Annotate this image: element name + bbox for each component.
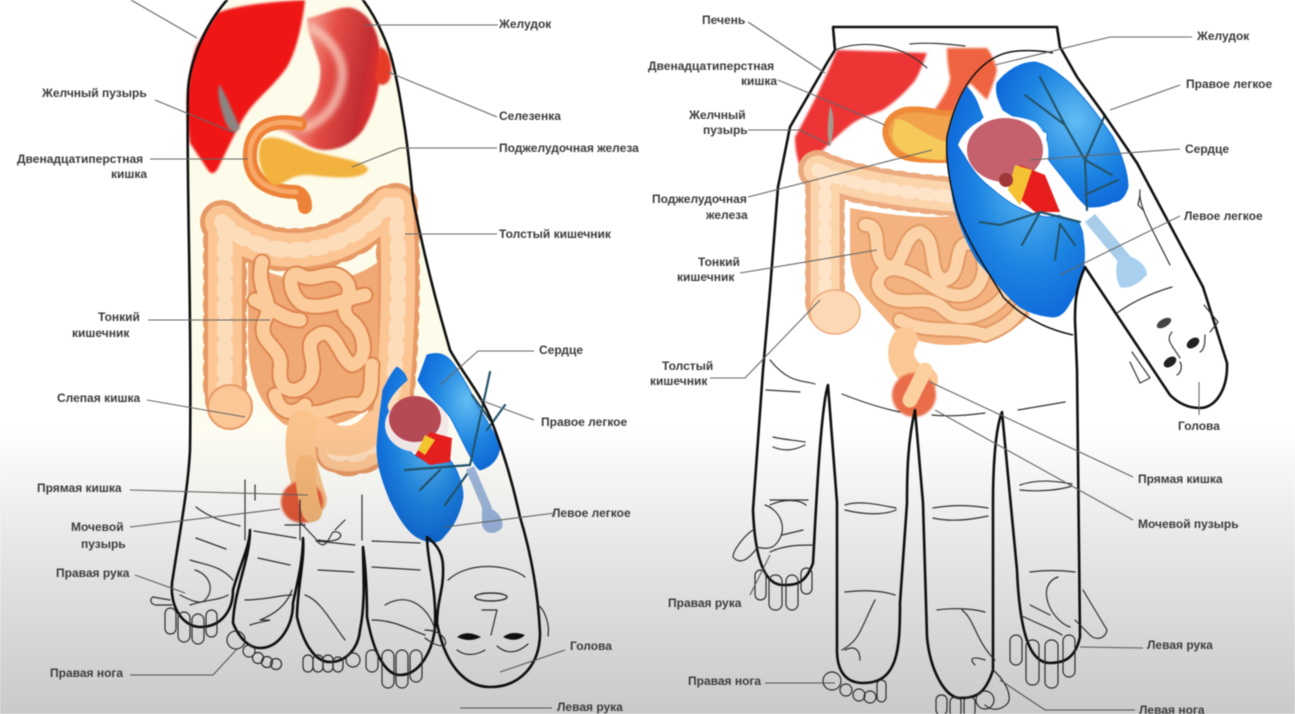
hand palm fill: [753, 27, 1227, 698]
labels: foot: Сердце: [539, 343, 583, 357]
labels: foot: кишечник: [72, 326, 130, 340]
labels: foot: Правая нога: [50, 666, 123, 680]
labels: hand: Толстый: [662, 359, 713, 373]
labels: hand: Правое легкое: [1186, 77, 1272, 91]
rectum (foot): [300, 425, 312, 500]
labels: hand: кишка: [741, 74, 777, 88]
labels: foot: Левое легкое: [552, 506, 631, 520]
toes: left hand on hand: [1010, 590, 1107, 688]
cecum (foot): [208, 385, 252, 429]
labels: foot: Селезенка: [499, 109, 561, 123]
pancreas (foot): [259, 137, 368, 186]
labels: foot: Голова: [570, 639, 612, 653]
labels: foot: Правое легкое: [541, 415, 628, 429]
cecum (hand): [810, 290, 860, 334]
labels: hand: Мочевой пузырь: [1138, 517, 1239, 531]
sigmoid bulge (foot): [322, 425, 376, 441]
labels: foot: Желудок: [498, 17, 552, 31]
palm creases: [757, 43, 1075, 665]
liver (foot): [187, 0, 305, 173]
labels: hand: Тонкий: [698, 255, 740, 269]
labels: foot: Толстый кишечник: [499, 227, 612, 241]
labels: hand: Левая рука: [1147, 638, 1213, 652]
labels: foot: Прямая кишка: [37, 481, 122, 495]
toes: right foot on hand: [823, 672, 886, 703]
heart (foot): [385, 396, 452, 465]
duodenum and pancreas (hand): [885, 109, 955, 160]
labels: foot: Желчный пузырь: [41, 86, 147, 100]
bronchi (hand): [980, 77, 1118, 260]
left lung (hand): [948, 87, 1084, 317]
liver (hand): [795, 50, 927, 167]
toes: left hand on foot: [366, 630, 446, 688]
small intestine (hand): [850, 208, 1030, 345]
thumb base curve: [947, 51, 1073, 335]
labels: hand: Двенадцатиперстная: [648, 59, 774, 73]
right lung (hand): [996, 62, 1128, 207]
heart (hand): [958, 116, 1085, 222]
trachea (foot): [470, 468, 503, 533]
toes: left foot on hand: [936, 670, 1009, 714]
stomach (hand): [933, 48, 997, 137]
large intestine (foot): [208, 205, 398, 454]
labels: hand: Желчный: [688, 108, 746, 122]
labels: hand: пузырь: [703, 123, 748, 137]
bladder (foot): [281, 481, 323, 523]
labels: hand: Прямая кишка: [1138, 472, 1223, 486]
head on foot: [457, 593, 548, 654]
foot silhouette: [172, 0, 540, 687]
large intestine (hand): [810, 170, 955, 334]
foot outline: [172, 0, 540, 687]
labels: hand: Левое легкое: [1184, 209, 1263, 223]
labels: foot: Двенадцатиперстная: [17, 152, 143, 166]
labels: hand: кишечник: [677, 270, 735, 284]
head on hand: [1117, 190, 1218, 383]
labels: foot: Мочевой: [71, 520, 124, 534]
bladder (hand): [892, 373, 936, 417]
small intestine (foot): [248, 262, 378, 426]
labels: hand: Голова: [1178, 419, 1220, 433]
labels: foot: Слепая кишка: [57, 391, 140, 405]
labels: foot: Левая рука: [557, 700, 623, 714]
labels: hand: Печень: [702, 13, 745, 27]
labels: hand: Правая нога: [688, 674, 761, 688]
bronchi (foot): [405, 372, 505, 505]
labels: foot: Правая рука: [56, 566, 130, 580]
labels: foot: [17, 17, 639, 714]
labels: hand: Желудок: [1196, 29, 1250, 43]
stomach (foot): [262, 7, 380, 150]
labels: hand: железа: [705, 208, 748, 222]
right lung (foot): [418, 353, 500, 470]
labels: foot: пузырь: [81, 537, 126, 551]
foot creases and inner hand/foot lines: [180, 480, 525, 640]
labels: foot: Тонкий: [98, 310, 140, 324]
trachea (hand): [1090, 218, 1147, 288]
labels: hand: [648, 13, 1272, 714]
gallbladder (hand): [828, 105, 833, 147]
labels: foot: кишка: [111, 167, 147, 181]
spleen (foot): [375, 47, 391, 85]
labels: hand: Сердце: [1185, 142, 1229, 156]
rectum (hand): [901, 340, 925, 380]
toes: right foot on foot: [227, 631, 282, 670]
toes: left foot on foot: [303, 653, 360, 672]
toes: right hand on hand: [733, 530, 812, 610]
gallbladder (foot): [218, 84, 240, 132]
labels: hand: Правая рука: [668, 596, 742, 610]
labels: foot: Поджелудочная железа: [499, 141, 639, 155]
labels: hand: кишечник: [650, 374, 708, 388]
left lung (foot): [377, 367, 463, 542]
toes: right hand on foot: [151, 597, 217, 644]
duodenum (foot): [250, 122, 305, 207]
labels: hand: Поджелудочная: [652, 192, 747, 206]
hand outline: [753, 27, 1227, 698]
